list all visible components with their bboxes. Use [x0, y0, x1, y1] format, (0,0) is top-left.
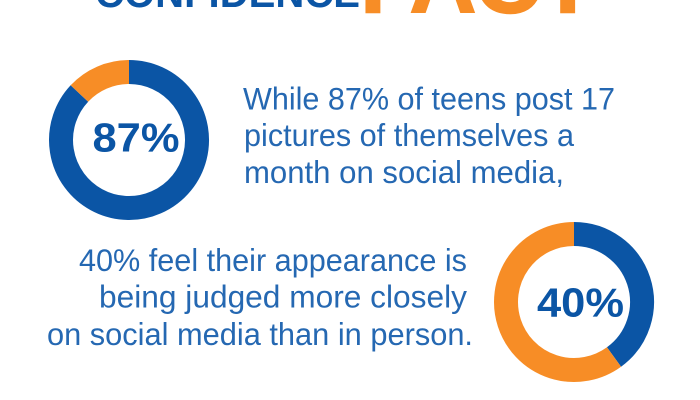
text block: appearance judged: 40% feel their appearance is: [79, 242, 467, 278]
donut label: 87%: 87%: [92, 114, 180, 160]
text block: teens post pictures: [243, 80, 615, 190]
text block: appearance judged: being judged more closely: [99, 279, 467, 315]
donut chart: 40%: [506, 234, 642, 370]
donut chart: 87%: [61, 72, 197, 208]
title: [95, 0, 596, 32]
text block: teens post pictures: pictures of themselves a: [244, 117, 574, 153]
text block: teens post pictures: While 87% of teens post 17: [243, 80, 615, 116]
text block: teens post pictures: month on social media,: [244, 154, 564, 190]
text block: appearance judged: [47, 242, 473, 352]
text block: appearance judged: on social media than in person.: [47, 316, 473, 352]
donut label: 40%: 40%: [537, 280, 624, 326]
